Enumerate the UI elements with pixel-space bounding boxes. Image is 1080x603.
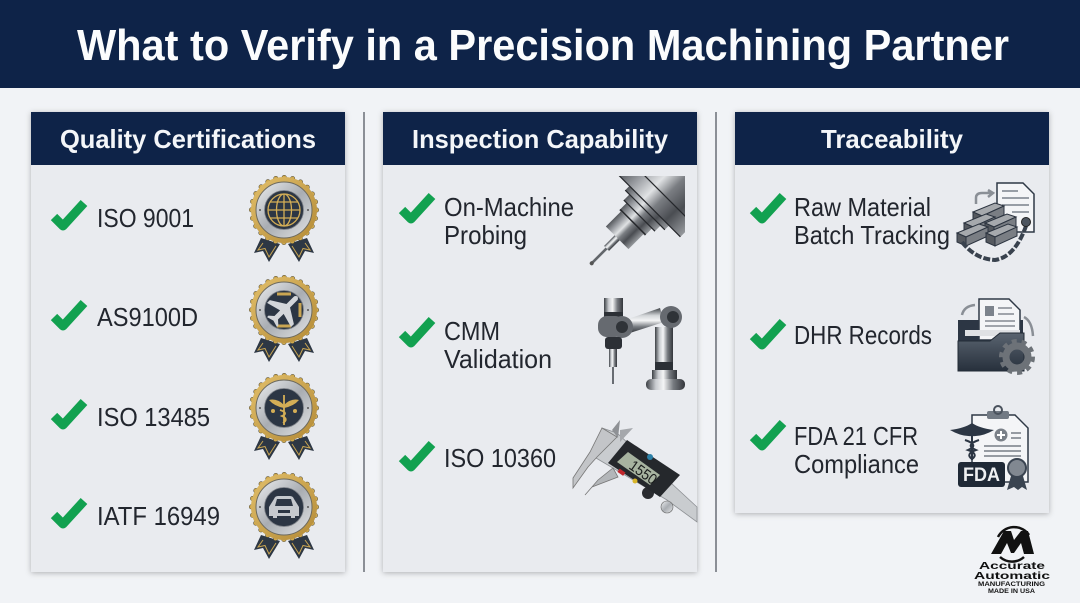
item: ISO 13485: ISO 13485 <box>97 402 210 432</box>
item: IATF 16949: IATF 16949 <box>97 501 220 531</box>
icon: car badge <box>251 474 317 559</box>
item: ISO 10360: ISO 10360 <box>444 443 556 473</box>
item: on-machine probing: Probing <box>444 220 527 250</box>
icon: digital caliper: 1550 <box>626 457 660 488</box>
item: FDA 21 CFR compliance: Compliance <box>794 449 919 479</box>
logo: Accurate Automatic Manufacturing <box>974 527 1050 595</box>
item: DHR records <box>753 320 932 350</box>
panel: inspection capability <box>383 112 732 572</box>
item: FDA 21 CFR compliance: FDA 21 CFR <box>794 421 918 451</box>
item: ISO 9001 <box>54 203 194 233</box>
logo: Accurate Automatic Manufacturing: MANUFACTURING <box>978 581 1045 588</box>
item: AS9100D: AS9100D <box>97 302 198 332</box>
logo: Accurate Automatic Manufacturing: Automatic <box>974 570 1050 582</box>
heading: inspection capability: Inspection Capability <box>412 124 669 154</box>
title: What to Verify in a Precision Machining Partner <box>77 21 1009 70</box>
icon: machine spindle probe <box>590 176 685 266</box>
item: FDA 21 CFR compliance <box>753 421 919 479</box>
icon: FDA clipboard and caduceus: FDA <box>963 465 1000 486</box>
icon: digital caliper <box>573 420 697 522</box>
icon: globe badge <box>251 177 317 262</box>
item: raw material batch tracking: Raw Material <box>794 192 931 222</box>
item: AS9100D <box>54 302 198 332</box>
item: on-machine probing: On-Machine <box>444 192 574 222</box>
item: ISO 10360 <box>402 443 556 473</box>
item: raw material batch tracking: Batch Tracking <box>794 220 950 250</box>
icon: metal ingots with document and chain <box>957 183 1034 260</box>
item: ISO 9001: ISO 9001 <box>97 203 194 233</box>
icon: CMM arm <box>598 298 685 390</box>
icon: FDA clipboard and caduceus <box>950 406 1028 490</box>
icon: caduceus badge <box>251 375 317 460</box>
heading: quality certifications: Quality Certifications <box>60 124 316 154</box>
icon: aircraft badge <box>251 277 317 362</box>
item: IATF 16949 <box>54 501 220 531</box>
item: ISO 13485 <box>54 402 210 432</box>
panel: quality certifications <box>31 112 345 572</box>
title bar <box>0 0 1080 88</box>
icon: folder with document and gear <box>958 299 1033 373</box>
logo: Accurate Automatic Manufacturing: Accurate <box>979 560 1045 572</box>
heading: traceability: Traceability <box>821 124 964 154</box>
logo: Accurate Automatic Manufacturing: MADE IN USA <box>988 588 1035 595</box>
item: DHR records: DHR Records <box>794 320 932 350</box>
item: CMM validation: Validation <box>444 344 552 374</box>
item: on-machine probing <box>402 192 574 250</box>
item: CMM validation: CMM <box>444 316 500 346</box>
panel: traceability <box>735 112 1049 513</box>
logo mark <box>991 527 1034 562</box>
item: CMM validation <box>402 316 552 374</box>
item: raw material batch tracking <box>753 192 950 250</box>
